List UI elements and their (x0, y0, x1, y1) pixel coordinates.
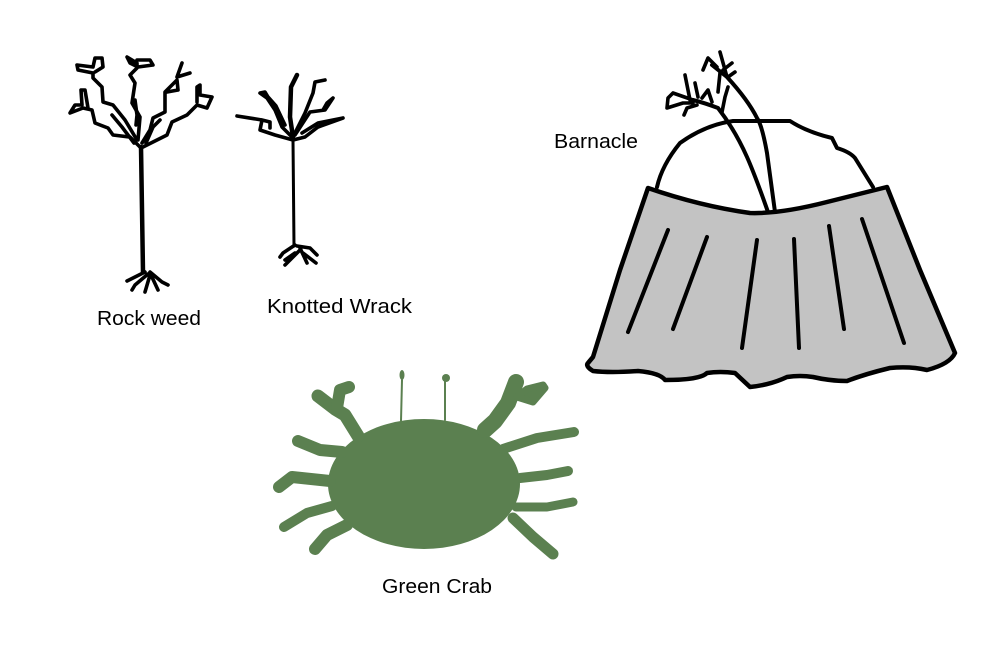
organism: barnacle (587, 52, 955, 387)
knotted wrack fronds (237, 75, 343, 140)
barnacle dome (657, 121, 873, 187)
rock weed fronds (70, 57, 212, 147)
barnacle cirri stalks (693, 65, 775, 212)
label: barnacle: Barnacle (554, 131, 638, 153)
barnacle cirri fronds (667, 52, 735, 115)
rock weed stem (141, 147, 143, 272)
barnacle shell ridges (628, 219, 904, 348)
organism: knotted wrack (237, 75, 343, 265)
rock weed roots (127, 272, 168, 292)
label: rock weed: Rock weed (97, 308, 201, 330)
knotted wrack roots (280, 245, 317, 265)
crab eye stalks (400, 370, 450, 421)
label: knotted wrack: Knotted Wrack (267, 296, 413, 318)
organism: rock weed (70, 57, 212, 292)
knotted wrack stem (293, 140, 294, 246)
label: green crab: Green Crab (382, 576, 492, 598)
crab body (328, 419, 520, 549)
crab left legs (279, 387, 358, 549)
barnacle shell (587, 187, 955, 387)
organism: green crab (279, 370, 574, 554)
crab right legs (485, 382, 574, 554)
